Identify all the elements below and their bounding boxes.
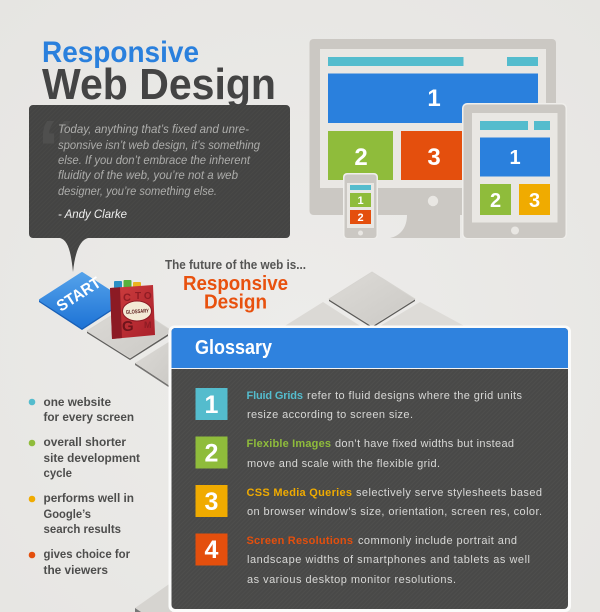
icon: glossary book: C bbox=[123, 292, 131, 304]
desktop monitor: 1 bbox=[427, 85, 441, 112]
phone bbox=[343, 173, 378, 239]
icon: glossary book: T O bbox=[135, 291, 152, 302]
desktop monitor: 3 bbox=[427, 144, 441, 171]
term 4: screen resolutions bbox=[196, 534, 530, 586]
term 4: screen resolutions: as various desktop monitor resolutions. bbox=[247, 574, 456, 586]
benefit: search results: Google’s bbox=[44, 507, 91, 521]
benefit: choice for viewers: the viewers bbox=[44, 563, 108, 577]
title: Responsive bbox=[42, 36, 199, 69]
tagline: The future of the web is... bbox=[165, 258, 306, 272]
term 1: fluid grids: refer to fluid designs where the grid units bbox=[307, 390, 522, 402]
benefit: shorter cycle: site development bbox=[44, 451, 140, 465]
term 4: screen resolutions: Screen Resolutions bbox=[246, 535, 353, 547]
term 4: screen resolutions: 4 bbox=[205, 536, 219, 564]
benefit: one website: one website bbox=[44, 395, 111, 409]
term 1: fluid grids bbox=[196, 388, 522, 421]
benefit: shorter cycle bbox=[29, 435, 140, 480]
benefit: search results: search results bbox=[44, 522, 121, 536]
term 1: fluid grids: resize according to screen size. bbox=[247, 409, 413, 421]
term 3: css media queries: on browser window’s size, orientation, screen res, color. bbox=[247, 506, 542, 518]
glossary header bbox=[172, 328, 568, 369]
term 2: flexible images: don’t have fixed widths but instead bbox=[335, 438, 514, 450]
panel: glossary bbox=[168, 326, 571, 612]
term 2: flexible images bbox=[196, 436, 514, 470]
quote text: sponsive isn’t web design, it’s something bbox=[58, 138, 260, 152]
term 1: fluid grids: Fluid Grids bbox=[246, 390, 303, 402]
term 2: flexible images: Flexible Images bbox=[246, 438, 331, 450]
benefits list bbox=[29, 395, 140, 577]
icon: glossary book: M bbox=[144, 320, 152, 330]
benefit: one website bbox=[29, 395, 134, 424]
term 1: fluid grids: 1 bbox=[205, 391, 219, 419]
term 2: flexible images: 2 bbox=[205, 440, 218, 468]
phone: 2 bbox=[357, 212, 364, 224]
benefit: choice for viewers: gives choice for bbox=[44, 547, 130, 561]
glossary header: Glossary bbox=[195, 337, 273, 359]
term 3: css media queries bbox=[196, 485, 542, 518]
tablet: 2 bbox=[490, 190, 501, 212]
quote speech bubble bbox=[29, 104, 290, 272]
tablet: 1 bbox=[509, 147, 521, 169]
icon: glossary book: G bbox=[122, 318, 134, 335]
desktop monitor: 2 bbox=[354, 144, 368, 171]
term 3: css media queries: CSS Media Queries bbox=[246, 487, 352, 499]
tablet bbox=[462, 103, 567, 239]
quote text: else. If you don’t embrace the inherent bbox=[58, 153, 251, 167]
quote author: - Andy Clarke bbox=[58, 207, 127, 221]
tablet: 3 bbox=[529, 190, 540, 212]
term 4: screen resolutions: landscape widths of smartphones and tablets as well bbox=[247, 554, 530, 566]
quote text: fluidity of the web, you’re not a web bbox=[58, 168, 238, 182]
device illustration bbox=[310, 39, 567, 239]
term 3: css media queries: selectively serve stylesheets based bbox=[356, 487, 542, 499]
term 4: screen resolutions: commonly include portrait and bbox=[358, 535, 517, 547]
benefit: choice for viewers bbox=[29, 547, 130, 577]
board tiles bbox=[87, 272, 470, 612]
title: Web Design bbox=[42, 60, 276, 109]
tagline: Design bbox=[204, 292, 267, 314]
benefit: shorter cycle: overall shorter bbox=[44, 435, 126, 449]
tagline: Responsive bbox=[183, 273, 288, 295]
icon: glossary book: GLOSSARY bbox=[126, 308, 149, 316]
quote text bbox=[58, 122, 260, 198]
icon: glossary book bbox=[110, 280, 155, 339]
title bbox=[42, 36, 276, 109]
quote text: designer, you’re something else. bbox=[58, 184, 217, 198]
benefit: shorter cycle: cycle bbox=[44, 466, 72, 480]
quote text: Today, anything that’s fixed and unre- bbox=[58, 122, 249, 136]
term 2: flexible images: move and scale with the flexible grid. bbox=[247, 458, 440, 470]
start tile: START bbox=[54, 274, 104, 315]
benefit: search results: performs well in bbox=[44, 491, 134, 505]
benefit: search results bbox=[29, 491, 134, 536]
quotation mark: “ bbox=[37, 104, 77, 193]
desktop monitor bbox=[310, 39, 556, 238]
phone: 1 bbox=[357, 195, 364, 207]
benefit: one website: for every screen bbox=[44, 410, 134, 424]
tagline bbox=[165, 258, 306, 314]
start tile bbox=[39, 273, 125, 330]
term 3: css media queries: 3 bbox=[205, 488, 218, 516]
